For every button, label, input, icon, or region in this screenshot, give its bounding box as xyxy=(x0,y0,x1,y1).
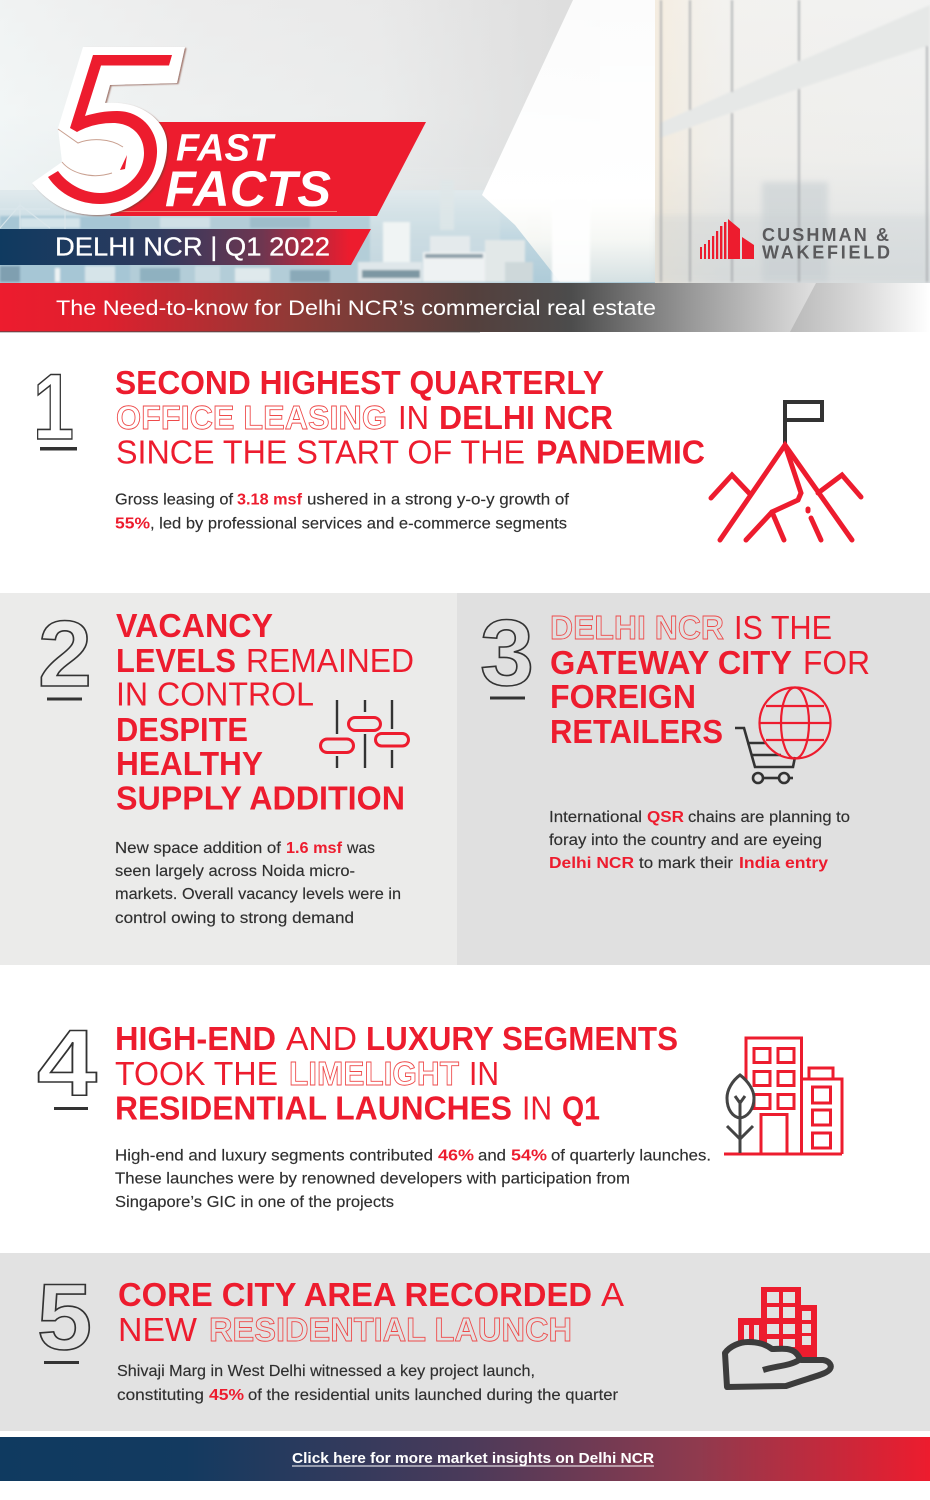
heading: DELHI NCR xyxy=(439,400,613,437)
body text: These launches were by renowned developers with participation from xyxy=(115,1170,630,1188)
heading xyxy=(116,608,414,818)
heading: LEVELS xyxy=(116,643,236,680)
logo: Cushman & Wakefield: WAKEFIELD xyxy=(762,242,890,262)
logo: Cushman & Wakefield xyxy=(700,219,890,262)
body text xyxy=(115,1148,711,1211)
header banner xyxy=(0,0,930,332)
panel: fact 2 xyxy=(0,593,457,965)
number 4: 4 xyxy=(37,1010,97,1115)
body text xyxy=(115,492,570,532)
number 5: 5 xyxy=(37,1264,92,1369)
body text: to mark their xyxy=(639,855,734,872)
heading xyxy=(118,1277,625,1349)
body text: 46% xyxy=(438,1148,474,1164)
heading: SUPPLY ADDITION xyxy=(116,780,405,818)
body text: Singapore’s GIC in one of the projects xyxy=(115,1194,394,1211)
red banner xyxy=(110,122,426,216)
heading: NEW xyxy=(118,1312,197,1349)
icon: buildings and tree xyxy=(724,1038,842,1154)
body text: seen largely across Noida micro- xyxy=(115,863,355,880)
logo mark xyxy=(700,219,754,259)
body text xyxy=(115,840,401,927)
footer link bar: Click here for more market insights on Delhi NCR xyxy=(292,1450,654,1467)
body text: 45% xyxy=(209,1387,244,1404)
heading: RETAILERS xyxy=(550,714,723,751)
body text: High-end and luxury segments contributed xyxy=(115,1148,433,1164)
panel: fact 3 xyxy=(457,593,930,965)
heading: DESPITE xyxy=(116,712,248,749)
heading: IS THE xyxy=(734,610,832,647)
body text: 1.6 msf xyxy=(286,840,343,857)
body text: constituting xyxy=(117,1387,204,1404)
heading: HEALTHY xyxy=(116,746,263,783)
header background photo xyxy=(0,0,930,283)
heading xyxy=(550,610,870,751)
heading: FOR xyxy=(803,645,870,682)
globe xyxy=(760,688,830,758)
body text: QSR xyxy=(647,809,684,826)
number 2: 2 xyxy=(38,601,92,706)
heading xyxy=(115,1021,678,1128)
heading: A xyxy=(601,1277,625,1314)
tagline bar: The Need-to-know for Delhi NCR’s commercial real estate xyxy=(56,296,656,320)
body text: control owing to strong demand xyxy=(115,910,354,927)
body text xyxy=(549,809,850,872)
heading xyxy=(115,365,705,472)
heading: OFFICE LEASING xyxy=(116,400,387,437)
location and quarter bar: DELHI NCR | Q1 2022 xyxy=(55,232,330,262)
body text: ushered in a strong y-o-y growth of xyxy=(307,492,570,508)
heading: REMAINED xyxy=(246,643,414,680)
panel: fact 1 xyxy=(0,333,930,593)
body text: foray into the country and are eyeing xyxy=(549,832,822,849)
text: FACTS: FACTS xyxy=(165,161,331,217)
heading: Q1 xyxy=(562,1090,600,1128)
logo: Cushman & Wakefield: CUSHMAN & xyxy=(762,225,889,245)
body text: Gross leasing of xyxy=(115,492,234,508)
body text: of quarterly launches. xyxy=(551,1148,711,1164)
number 3: 3 xyxy=(480,600,534,705)
body text: of the residential units launched during the quarter xyxy=(248,1387,619,1404)
heading: DELHI NCR xyxy=(550,610,724,647)
heading: IN xyxy=(398,400,429,437)
logo: 5 Fast Facts xyxy=(32,47,426,217)
text: FAST: FAST xyxy=(176,128,276,170)
body text: , led by professional services and e-commerce segments xyxy=(150,516,567,532)
heading: RESIDENTIAL LAUNCHES xyxy=(115,1090,512,1128)
heading: LIMELIGHT xyxy=(289,1056,459,1093)
body text: was xyxy=(346,840,375,857)
heading: SINCE THE START OF THE xyxy=(116,434,525,472)
heading: CORE CITY AREA RECORDED xyxy=(118,1277,592,1314)
heading: LUXURY SEGMENTS xyxy=(366,1021,678,1058)
icon: buildings on hand xyxy=(725,1287,831,1387)
heading: AND xyxy=(286,1021,357,1058)
heading: HIGH-END xyxy=(115,1021,276,1058)
body text: International xyxy=(549,809,642,826)
heading: IN xyxy=(469,1056,499,1093)
body text xyxy=(117,1363,619,1404)
icon: sliders xyxy=(320,700,408,768)
number 1: 1 xyxy=(33,354,74,459)
footer link bar xyxy=(0,1437,930,1481)
heading: SECOND HIGHEST QUARTERLY xyxy=(115,365,604,402)
heading: IN xyxy=(522,1090,552,1128)
location and quarter bar xyxy=(0,229,371,265)
body text: Delhi NCR xyxy=(549,855,634,872)
icon: globe in shopping cart xyxy=(735,688,830,783)
body text: chains are planning to xyxy=(688,809,850,826)
panel: fact 4 xyxy=(0,965,930,1253)
heading: PANDEMIC xyxy=(536,434,705,472)
body text: Shivaji Marg in West Delhi witnessed a key project launch, xyxy=(117,1363,535,1380)
body text: New space addition of xyxy=(115,840,282,857)
body text: 3.18 msf xyxy=(237,492,303,508)
heading: VACANCY xyxy=(116,608,273,645)
body text: 55% xyxy=(115,516,150,532)
heading: RESIDENTIAL LAUNCH xyxy=(209,1312,572,1349)
big numeral 5 xyxy=(32,47,185,215)
tagline bar xyxy=(0,283,930,332)
icon: mountain with flag xyxy=(711,402,861,540)
body text: and xyxy=(478,1148,506,1164)
panel: fact 5 xyxy=(0,1253,930,1431)
body text: 54% xyxy=(511,1148,547,1164)
heading: TOOK THE xyxy=(115,1056,278,1093)
heading: IN CONTROL xyxy=(116,676,314,714)
heading: GATEWAY CITY xyxy=(550,645,792,682)
heading: FOREIGN xyxy=(550,679,696,716)
body text: markets. Overall vacancy levels were in xyxy=(115,886,401,903)
body text: India entry xyxy=(739,855,828,872)
cart xyxy=(735,728,795,783)
